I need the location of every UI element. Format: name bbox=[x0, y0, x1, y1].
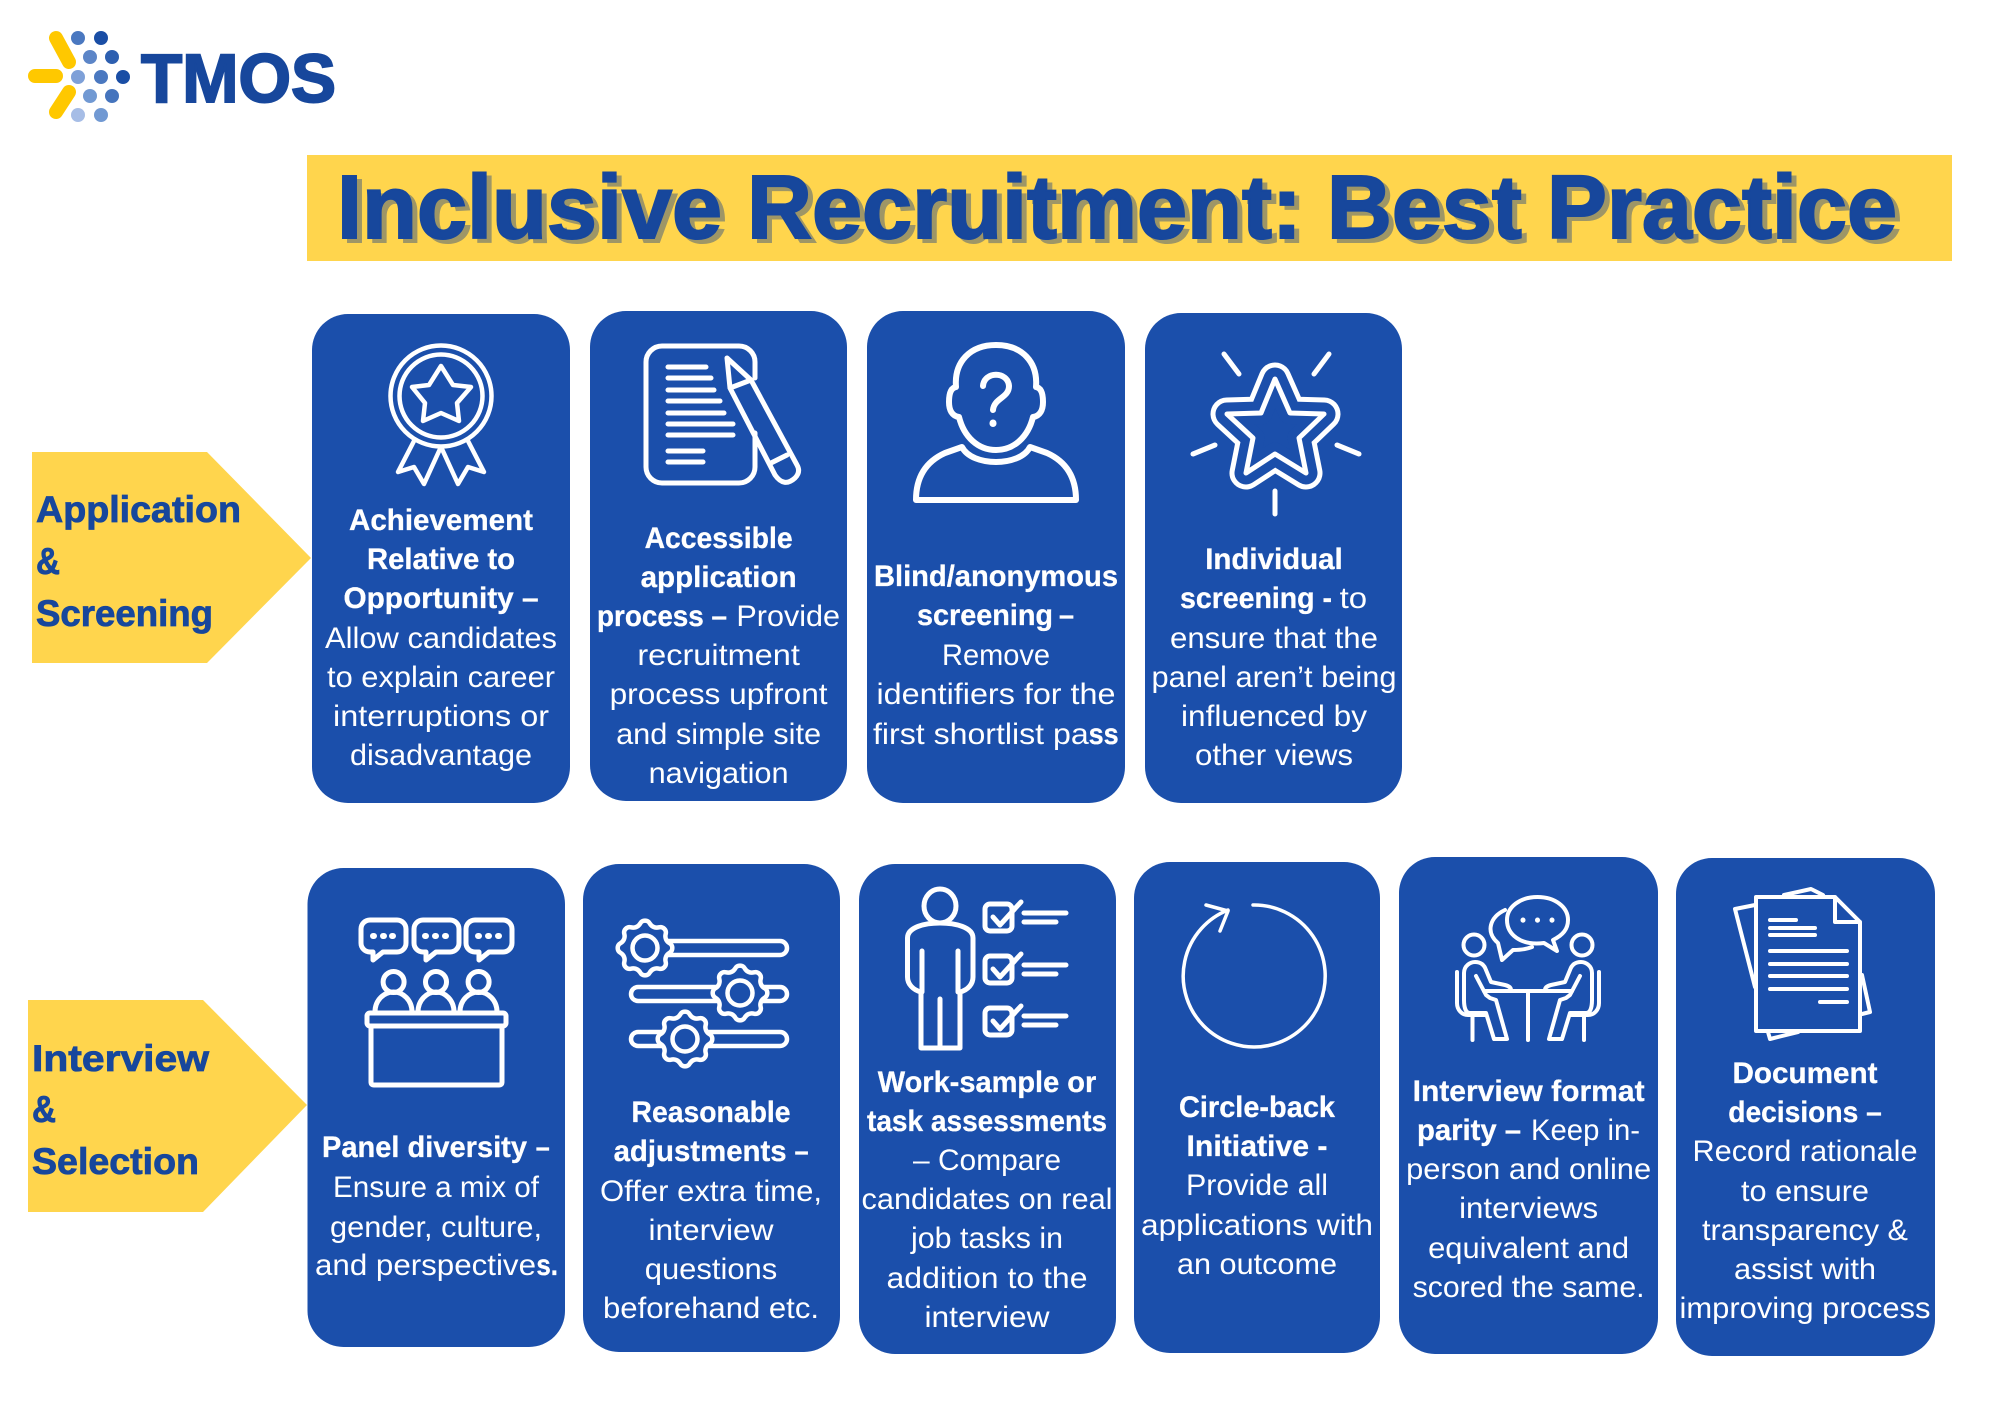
card text: – bbox=[1059, 599, 1074, 632]
card text: disadvantage bbox=[350, 739, 532, 772]
arrow label: Selection bbox=[32, 1141, 199, 1182]
card text: screening - bbox=[1180, 582, 1332, 615]
arrow label: Interview bbox=[32, 1038, 209, 1079]
card text: application bbox=[641, 561, 797, 594]
card text: Offer extra time, bbox=[600, 1175, 822, 1208]
card text: to explain career bbox=[327, 661, 555, 694]
card text: addition to the bbox=[886, 1262, 1088, 1295]
card background bbox=[867, 311, 1125, 803]
card text: navigation bbox=[649, 757, 789, 790]
card text: Opportunity – bbox=[344, 582, 538, 615]
card text bbox=[597, 522, 840, 790]
card text: Allow candidates bbox=[325, 622, 557, 655]
card text: Circle-back bbox=[1179, 1091, 1335, 1124]
arrow label: Application bbox=[36, 489, 241, 530]
card text: job tasks in bbox=[910, 1222, 1063, 1255]
card background bbox=[583, 864, 840, 1352]
card text: interview bbox=[648, 1214, 774, 1247]
logo: TMOS bbox=[35, 31, 336, 122]
logo mark: yellow rays and blue dots bbox=[35, 31, 130, 122]
panel: Accessible application process bbox=[590, 311, 847, 801]
card text bbox=[1406, 1075, 1651, 1304]
card background bbox=[1676, 858, 1935, 1356]
card text: Remove bbox=[942, 639, 1050, 672]
panel: Interview format parity bbox=[1399, 857, 1658, 1354]
card background bbox=[308, 868, 565, 1347]
card text: an outcome bbox=[1177, 1248, 1337, 1281]
card text: other views bbox=[1195, 739, 1353, 772]
card text: interview bbox=[924, 1301, 1050, 1334]
card text: first shortlist pa bbox=[873, 718, 1089, 751]
card background bbox=[312, 314, 570, 803]
arrow shape bbox=[32, 452, 311, 663]
card text: gender, culture, bbox=[330, 1211, 542, 1244]
icon: medal with star bbox=[390, 346, 492, 484]
banner background bbox=[307, 155, 1952, 261]
card text: Initiative - bbox=[1186, 1130, 1328, 1163]
panel: Blind/anonymous screening bbox=[867, 311, 1125, 803]
card text: Provide bbox=[736, 600, 840, 633]
arrow: Interview & Selection bbox=[28, 1000, 307, 1212]
card text: influenced by bbox=[1181, 700, 1367, 733]
card text: to ensure bbox=[1741, 1175, 1869, 1208]
title shadow: Inclusive Recruitment: Best Practice bbox=[342, 162, 1902, 262]
card text: Ensure a mix of bbox=[333, 1171, 540, 1204]
card text bbox=[862, 1066, 1112, 1334]
card text bbox=[873, 560, 1119, 751]
card text: ensure that the bbox=[1170, 622, 1378, 655]
card text: adjustments bbox=[614, 1135, 787, 1168]
card text bbox=[1141, 1091, 1373, 1281]
card text: person and online bbox=[1406, 1153, 1651, 1186]
card text: and perspective bbox=[315, 1249, 536, 1282]
card text bbox=[1680, 1057, 1930, 1325]
card text: Blind/anonymous bbox=[874, 560, 1118, 593]
card text: panel aren’t being bbox=[1152, 661, 1396, 694]
card background bbox=[1134, 862, 1380, 1353]
card text: – bbox=[536, 1131, 550, 1164]
card text: to bbox=[1340, 582, 1367, 615]
card text: Provide all bbox=[1186, 1169, 1328, 1202]
panel: Circle-back Initiative bbox=[1134, 862, 1380, 1353]
card text: process upfront bbox=[610, 678, 828, 711]
card text: Work-sample or bbox=[878, 1066, 1097, 1099]
arrow label bbox=[36, 489, 241, 634]
card text: – bbox=[795, 1135, 809, 1168]
card text: Accessible bbox=[645, 522, 793, 555]
card background bbox=[590, 311, 847, 801]
panel: Document decisions bbox=[1676, 858, 1935, 1356]
panel: Reasonable adjustments bbox=[583, 864, 840, 1352]
panel: Individual screening bbox=[1145, 313, 1402, 803]
card text bbox=[315, 1131, 558, 1282]
title banner bbox=[307, 155, 1952, 262]
panel: Work-sample or task assessments bbox=[859, 864, 1116, 1354]
card text: identifiers for the bbox=[876, 678, 1116, 711]
icon: stacked documents bbox=[1735, 889, 1870, 1039]
card background bbox=[859, 864, 1116, 1354]
card text: interviews bbox=[1459, 1192, 1598, 1225]
card text: transparency & bbox=[1702, 1214, 1908, 1247]
card text bbox=[325, 504, 557, 772]
card text: candidates on real bbox=[862, 1183, 1112, 1216]
card text: Relative to bbox=[367, 543, 515, 576]
card text: Interview format bbox=[1413, 1075, 1645, 1108]
icon: anonymous person with question mark bbox=[916, 345, 1076, 500]
card text: and simple site bbox=[616, 718, 821, 751]
icon: star with rays bbox=[1193, 354, 1359, 514]
card text: improving process bbox=[1680, 1292, 1930, 1325]
card text bbox=[1152, 543, 1396, 772]
card text bbox=[600, 1096, 822, 1325]
card text: task assessments bbox=[867, 1105, 1107, 1138]
card background bbox=[1399, 857, 1658, 1354]
card text: decisions – bbox=[1728, 1096, 1882, 1129]
card text: recruitment bbox=[637, 639, 801, 672]
card text: questions bbox=[645, 1253, 777, 1286]
card text: Individual bbox=[1205, 543, 1343, 576]
logo wordmark: TMOS bbox=[141, 40, 336, 117]
icon: interview panel at desk with speech bubbles bbox=[361, 920, 512, 1085]
card text: parity – bbox=[1417, 1114, 1521, 1147]
card text: Reasonable bbox=[632, 1096, 790, 1129]
card text: Record rationale bbox=[1692, 1135, 1918, 1168]
arrow label: & bbox=[32, 1089, 56, 1130]
icon: person with checklist bbox=[908, 889, 1066, 1048]
card text: process – bbox=[597, 600, 727, 633]
title: Inclusive Recruitment: Best Practice bbox=[337, 158, 1897, 258]
card text: applications with bbox=[1141, 1209, 1373, 1242]
arrow label: & bbox=[36, 541, 60, 582]
card text: assist with bbox=[1734, 1253, 1876, 1286]
card text: Panel diversity bbox=[322, 1131, 527, 1164]
panel: Achievement Relative to Opportunity bbox=[312, 314, 570, 803]
card text: scored the same. bbox=[1413, 1271, 1645, 1304]
card text: ss bbox=[1089, 718, 1119, 751]
card text: s. bbox=[536, 1249, 558, 1282]
icon: document and pencil bbox=[646, 346, 799, 483]
icon: gear sliders bbox=[618, 921, 787, 1066]
card text: screening bbox=[917, 599, 1053, 632]
arrow label: Screening bbox=[36, 593, 213, 634]
arrow: Application & Screening bbox=[32, 452, 311, 663]
card text: interruptions or bbox=[333, 700, 549, 733]
icon: two people talking at a table bbox=[1457, 897, 1599, 1040]
card text: Document bbox=[1732, 1057, 1878, 1090]
arrow label bbox=[32, 1038, 209, 1182]
card text: Achievement bbox=[349, 504, 533, 537]
card background bbox=[1145, 313, 1402, 803]
card text: beforehand etc. bbox=[603, 1292, 819, 1325]
arrow shape bbox=[28, 1000, 307, 1212]
card text: – Compare bbox=[913, 1144, 1061, 1177]
panel: Panel diversity bbox=[308, 868, 565, 1347]
card text: equivalent and bbox=[1428, 1232, 1629, 1265]
icon: circular arrow bbox=[1183, 905, 1325, 1047]
card text: Keep in- bbox=[1531, 1114, 1640, 1147]
